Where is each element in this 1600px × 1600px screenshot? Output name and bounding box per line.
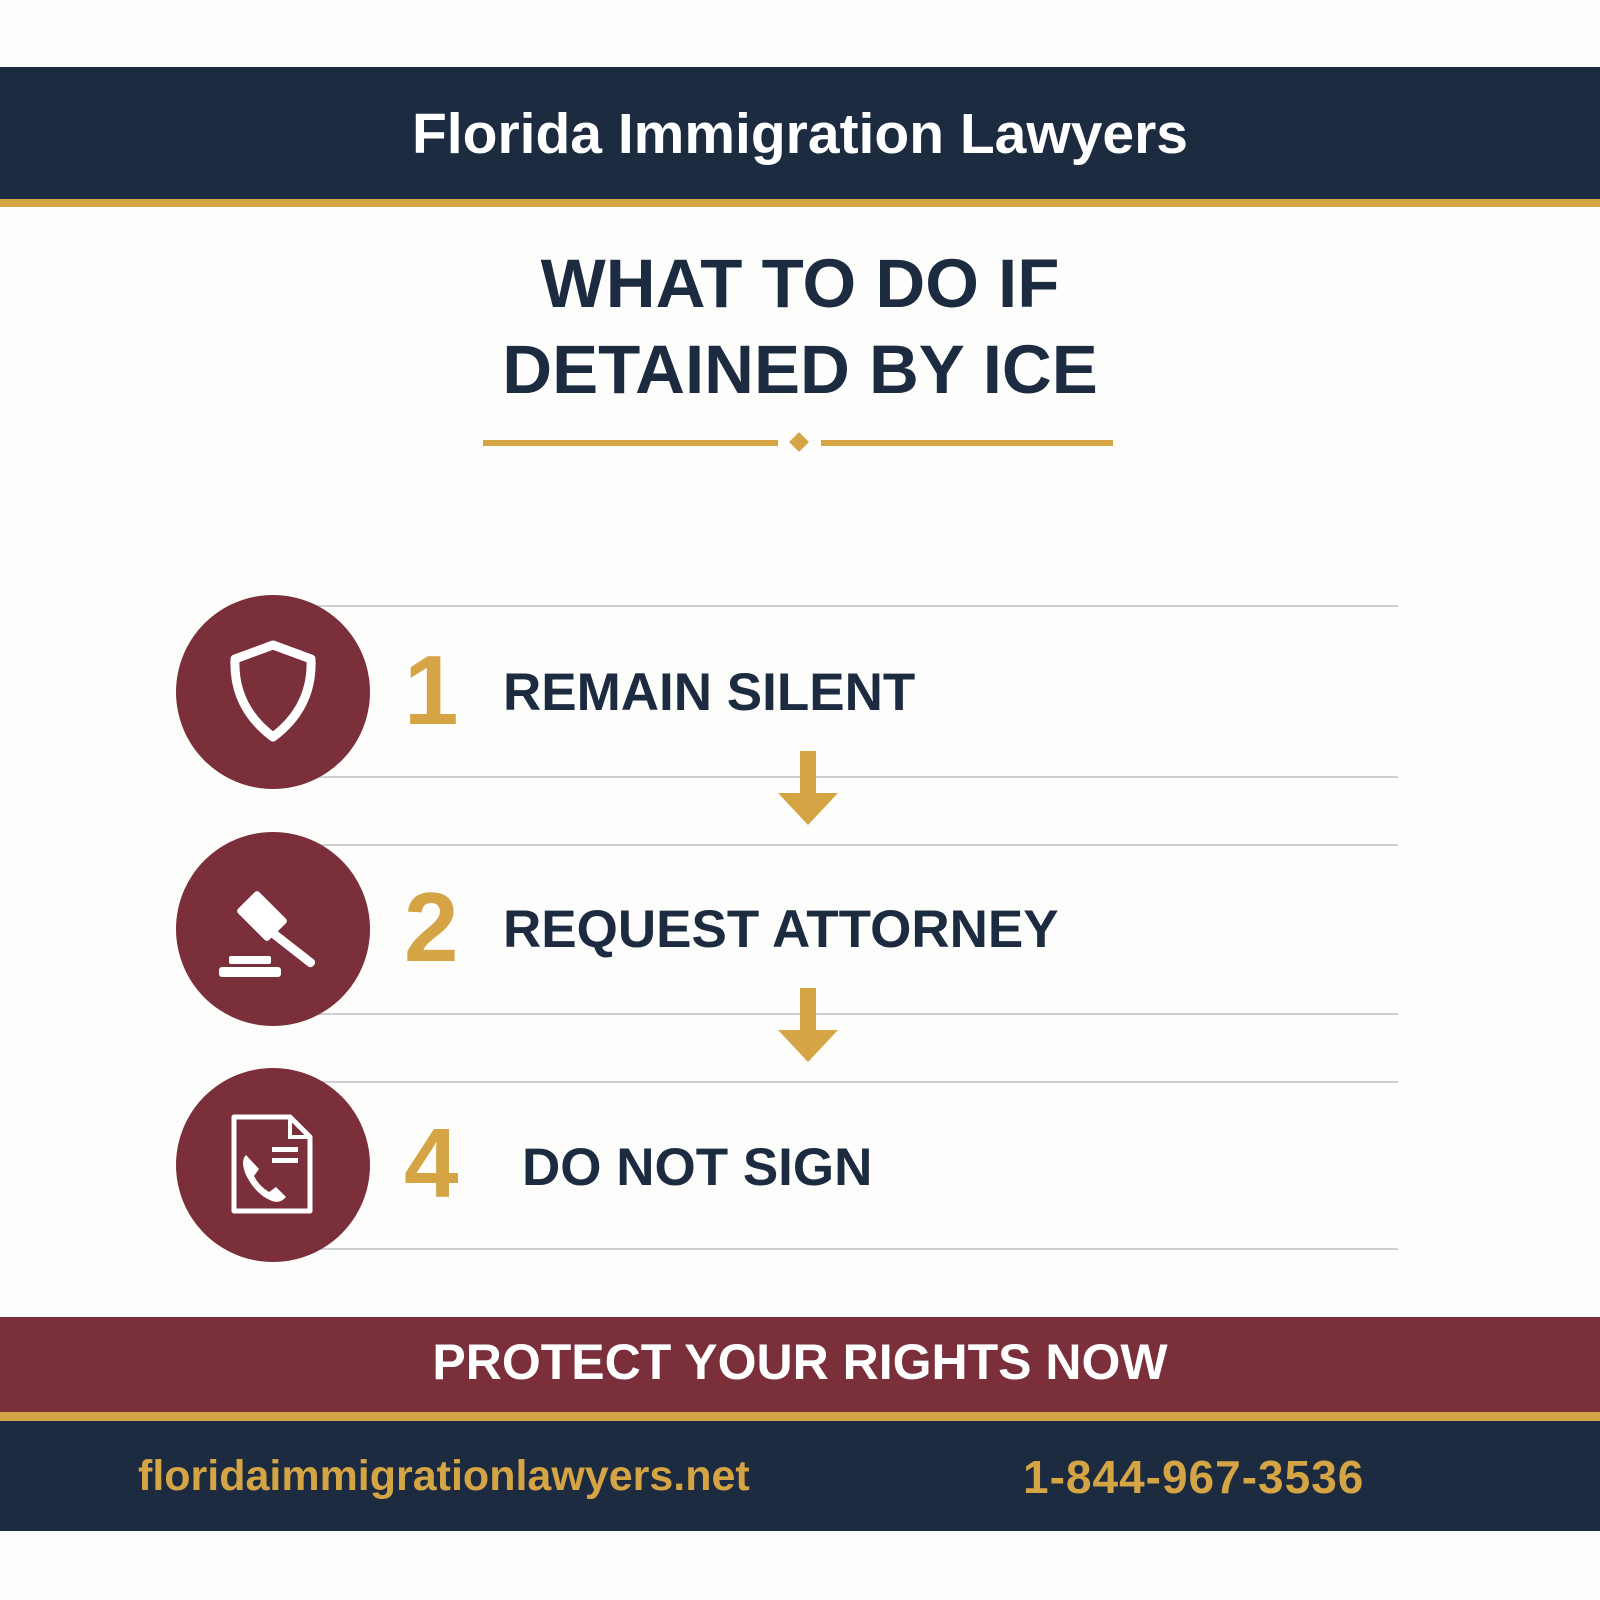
cta banner: PROTECT YOUR RIGHTS NOW <box>432 1334 1168 1390</box>
label: REQUEST ATTORNEY <box>503 900 1059 959</box>
header bar: Florida Immigration Lawyers <box>412 102 1188 166</box>
arrow 1 <box>778 751 838 825</box>
number 2: 2 <box>404 872 459 982</box>
arrow 2 <box>778 988 838 1062</box>
label: REMAIN SILENT <box>503 663 915 722</box>
step 4 <box>176 1068 872 1262</box>
icon: gavel <box>176 832 370 1026</box>
phone: 1-844-967-3536 <box>1023 1451 1364 1503</box>
footer <box>0 1421 1600 1531</box>
header bar <box>0 67 1600 207</box>
step 2 <box>176 832 1059 1026</box>
icon: document with phone <box>176 1068 370 1262</box>
label: DO NOT SIGN <box>522 1138 872 1197</box>
title divider <box>483 432 1113 452</box>
cta banner <box>0 1317 1600 1421</box>
icon: shield <box>176 595 370 789</box>
title: DETAINED BY ICE <box>502 331 1098 408</box>
number 1: 1 <box>404 635 459 745</box>
title <box>502 245 1098 408</box>
website: floridaimmigrationlawyers.net <box>138 1452 750 1500</box>
title: WHAT TO DO IF <box>541 245 1059 322</box>
step 1 <box>176 595 915 789</box>
number 4: 4 <box>404 1108 459 1218</box>
